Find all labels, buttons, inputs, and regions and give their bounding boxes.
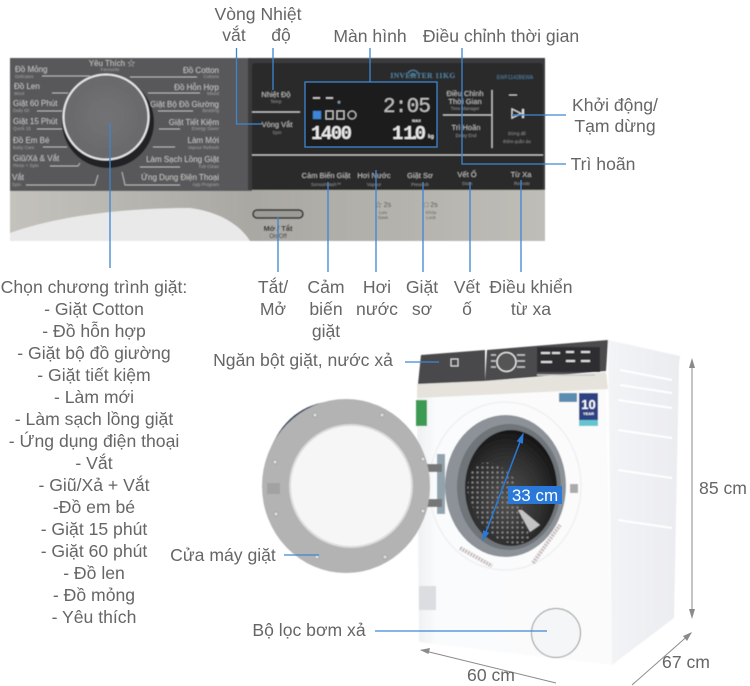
warranty badge: 10 <box>581 397 596 412</box>
warranty badge: YEAR <box>583 411 594 416</box>
programme labels left: Đồ Len <box>14 82 40 91</box>
button labels on display: Remote <box>514 181 530 186</box>
panel: silver lower trim <box>10 190 545 241</box>
button labels on display: Vòng Vắt <box>262 120 293 129</box>
button labels on display: Stain <box>462 181 473 186</box>
programme labels left: Đồ Mỏng <box>15 65 47 74</box>
door back seal <box>267 402 327 460</box>
display readout: 2:05 <box>383 96 431 119</box>
programme labels right: Làm Mới <box>188 136 219 145</box>
programme list: - Vắt <box>75 452 113 473</box>
programme list: Chọn chương trình giặt: <box>1 277 187 297</box>
panel: white curved drum area <box>10 208 250 241</box>
programme labels left: Rinse + Spin <box>13 163 39 168</box>
programme list <box>1 277 187 627</box>
top labels: độ <box>271 25 291 45</box>
dimension: depth <box>632 632 710 685</box>
on off button: On/Off <box>269 234 287 240</box>
programme labels left: Spin <box>12 182 22 187</box>
programme labels right: Mixed <box>207 91 219 96</box>
programme labels left: Quick 15 <box>13 126 31 131</box>
control panel right <box>485 340 608 381</box>
bottom panel labels: Mở <box>260 299 287 319</box>
programme labels right: Đồ Hỗn Hợp <box>174 83 220 92</box>
bottom panel labels: Giặt <box>406 277 438 297</box>
button labels on display: Trì Hoãn <box>452 123 480 132</box>
button labels on display: Giặt Sơ <box>407 171 433 180</box>
programme labels top <box>89 59 135 72</box>
programme list: - Giặt Cotton <box>44 299 144 319</box>
button labels on display: SensorWash™ <box>311 182 341 187</box>
machine side <box>608 340 680 665</box>
door seal inner ring <box>457 424 561 550</box>
programme labels right: Ứng Dụng Điện Thoại <box>141 173 219 182</box>
door callout: Cửa máy giặt <box>170 545 276 565</box>
diameter label: 33 cm <box>512 486 558 505</box>
programme labels left: Baby Care <box>13 145 35 150</box>
display readout: 1400 <box>311 123 352 145</box>
warning sticker <box>419 586 436 610</box>
icon: start pause <box>503 95 531 144</box>
energy label <box>416 400 427 426</box>
bottom panel labels: biến <box>309 299 343 319</box>
programme list: - Đồ mỏng <box>53 585 135 605</box>
machine side vents <box>618 370 672 528</box>
panel: programme section <box>10 58 252 191</box>
filter callout: Bộ lọc bơm xả <box>252 620 366 640</box>
bottom panel labels: Vết <box>454 277 480 297</box>
programme list: -Đồ em bé <box>53 497 135 517</box>
bottom panel labels: Cảm <box>307 277 345 297</box>
dimension: depth: 67 cm <box>662 652 710 672</box>
dimension: height: 85 cm <box>699 478 747 498</box>
programme labels right: Vapour Refresh <box>188 145 219 150</box>
save and lock hints: Khóa <box>426 210 437 215</box>
washing machine <box>416 340 680 665</box>
programme list: - Đồ len <box>63 563 125 583</box>
programme labels right: Cottons <box>203 74 220 79</box>
door surround ring <box>429 402 581 570</box>
drum <box>465 430 557 546</box>
right labels: Trì hoãn <box>571 154 635 174</box>
screen outline <box>305 82 437 147</box>
icon: start pause: Dừng để <box>508 130 526 136</box>
button labels on display: Vapour <box>367 182 382 187</box>
control strip silver <box>417 372 608 398</box>
top labels <box>214 4 579 46</box>
programme labels right: Giặt Tiết Kiệm <box>169 118 219 127</box>
bottom panel labels: ố <box>462 299 472 319</box>
on off button: Mở / Tắt <box>263 224 293 233</box>
button labels on display: Vết Ố <box>457 169 477 179</box>
programme list: - Yêu thích <box>52 607 136 627</box>
programme list: - Làm sạch lồng giặt <box>15 409 173 429</box>
programme labels left: Giũ/Xả & Vắt <box>13 154 60 163</box>
programme labels left: Giặt 15 Phút <box>13 117 58 126</box>
right labels: Tạm dừng <box>574 116 656 136</box>
printed wash guide <box>460 525 560 566</box>
top labels: Màn hình <box>333 26 407 46</box>
door seal <box>445 415 566 557</box>
button labels on display: Delay End <box>456 133 477 138</box>
diameter arrow <box>483 434 523 540</box>
programme labels right: Làm Sạch Lồng Giặt <box>146 155 220 164</box>
display readout: MAX <box>412 118 421 123</box>
programme list: - Giặt bộ đồ giường <box>17 343 171 363</box>
programme list: - Làm mới <box>54 387 134 407</box>
bottom panel labels: sơ <box>412 299 433 319</box>
programme labels right: Bedding <box>202 108 219 113</box>
button labels on display: Temp <box>270 99 282 104</box>
programme labels right: App Program <box>192 182 219 187</box>
bottom panel labels <box>258 276 573 341</box>
right labels: Khởi động/ <box>572 95 658 115</box>
dimension: width: 60 cm <box>467 665 515 685</box>
programme list: - Giũ/Xả + Vắt <box>38 474 150 495</box>
programme labels left: Delicates <box>15 74 34 79</box>
top labels: Vòng <box>214 4 256 24</box>
panel: dark display section <box>248 58 545 190</box>
button labels on display: Prewash <box>411 182 429 187</box>
button labels on display: Cảm Biến Giặt <box>302 171 351 180</box>
door <box>262 399 430 573</box>
drum paddle <box>518 510 540 532</box>
button labels on display: Time Manager <box>451 106 480 111</box>
display readout: kg <box>428 134 434 140</box>
drum perforation <box>467 462 530 543</box>
display readout: * <box>337 99 341 109</box>
display readout <box>305 82 437 147</box>
programme labels top: Favourite <box>101 67 120 72</box>
display dividers <box>252 90 543 155</box>
programme labels left <box>12 65 98 187</box>
button labels on display: Thời Gian <box>448 97 482 106</box>
hinge <box>417 454 445 514</box>
button labels on display: Hơi Nước <box>357 171 391 180</box>
icon: wifi <box>408 70 418 76</box>
icon: start pause: thêm quần áo <box>503 139 531 144</box>
button labels on display: Nhiệt Độ <box>261 90 291 99</box>
programme labels right <box>122 66 220 187</box>
programme list: - Giặt tiết kiệm <box>37 365 151 385</box>
programme list: - Đồ hỗn hợp <box>42 320 146 341</box>
top labels: Nhiệt <box>260 4 302 24</box>
programme labels left: Daily 60 <box>13 108 30 113</box>
save and lock hints: Save <box>378 215 389 220</box>
control panel photo <box>10 58 545 241</box>
right labels <box>571 95 658 174</box>
door screws <box>273 413 425 559</box>
programme labels left: Đồ Em Bé <box>13 136 50 145</box>
door latch <box>267 483 280 494</box>
panel: display glass <box>252 63 543 190</box>
button labels on display: Spin <box>272 130 282 135</box>
button labels on display: Điều Chỉnh <box>446 89 484 98</box>
control panel left drawer <box>418 350 485 384</box>
top labels: Điều chỉnh thời gian <box>423 26 579 46</box>
programme labels left: Giặt 60 Phút <box>13 99 58 108</box>
programme labels left: Wool <box>14 91 24 96</box>
bottom panel labels: giặt <box>312 321 340 341</box>
programme labels right: Giặt Bộ Đồ Giường <box>150 100 219 109</box>
programme list: - Giặt 15 phút <box>41 519 147 539</box>
bottom panel labels: Hơi <box>363 277 391 297</box>
save and lock hints: □ 2s <box>424 202 438 209</box>
button labels on display <box>261 89 532 187</box>
dimension: height <box>689 358 747 619</box>
programme labels right: Tub Clean <box>198 164 219 169</box>
on off button <box>253 210 303 240</box>
mini panel details <box>451 347 600 375</box>
bottom panel labels: Tắt/ <box>258 276 288 297</box>
model code: EWF1142BEWA <box>497 75 534 81</box>
machine front <box>417 385 612 665</box>
button labels on display: Từ Xa <box>511 170 532 179</box>
programme list: - Ứng dụng điện thoại <box>9 430 179 451</box>
display readout: 1 1.0 <box>392 123 426 145</box>
dimension: width <box>420 648 556 685</box>
drain filter cover <box>532 608 580 658</box>
model heading: INVERTER 11KG <box>390 71 456 80</box>
programme list: - Giặt 60 phút <box>41 541 147 561</box>
bottom panel labels: từ xa <box>511 299 551 319</box>
top labels: vắt <box>222 24 246 45</box>
save and lock hints: Lock <box>426 215 436 220</box>
programme labels right: Đồ Cotton <box>183 66 219 75</box>
programme labels top: Yêu Thích ☆ <box>89 59 135 68</box>
programme labels right: Energy Saver <box>192 126 219 131</box>
leader lines for control panel <box>110 48 566 272</box>
icon: programme dial <box>62 74 154 168</box>
door lock <box>570 484 578 493</box>
bottom panel labels: Điều khiển <box>489 277 573 297</box>
save and lock hints <box>375 200 438 220</box>
bottom panel labels: nước <box>356 299 398 319</box>
save and lock hints: Lưu <box>379 210 387 215</box>
warranty badge <box>559 393 598 426</box>
door glass <box>290 425 412 547</box>
door ring <box>262 399 430 573</box>
machine callouts: Ngăn bột giặt, nước xả <box>213 350 393 370</box>
save and lock hints: ☆ 2s <box>375 200 392 209</box>
programme labels left: Vắt <box>12 173 25 182</box>
